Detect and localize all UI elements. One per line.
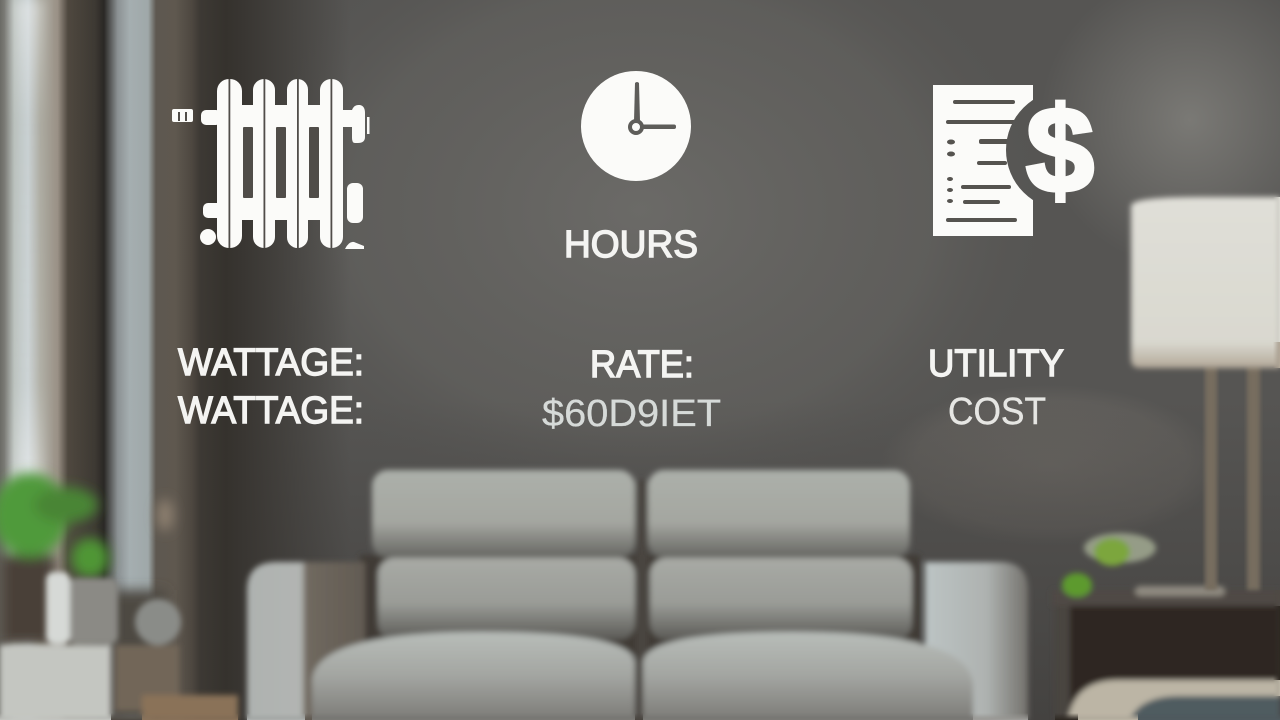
label: rate: RATE: [590, 344, 694, 386]
bill [933, 85, 1033, 236]
label: utility: UTILITY [928, 343, 1064, 385]
label: wattage line 2: WATTAGE: [178, 390, 364, 432]
icon: bill with dollar sign [933, 82, 1094, 236]
window and curtains [0, 0, 240, 720]
left plant, vase and books [0, 473, 238, 720]
icon: clock [581, 71, 691, 181]
label: garbled rate value: $60D9IET [542, 393, 721, 435]
sofa [247, 470, 1028, 720]
label: wattage line 1: WATTAGE: [178, 342, 364, 384]
right edge fill [1274, 197, 1280, 696]
dollar sign: $ [1026, 82, 1094, 218]
label: cost: COST [948, 391, 1046, 433]
icon: radiator [172, 79, 370, 249]
bottom edge fill [0, 714, 1280, 720]
floor lamp [1131, 197, 1280, 590]
right table, plant and blanket [1052, 533, 1280, 720]
label: hours: HOURS [564, 224, 698, 266]
